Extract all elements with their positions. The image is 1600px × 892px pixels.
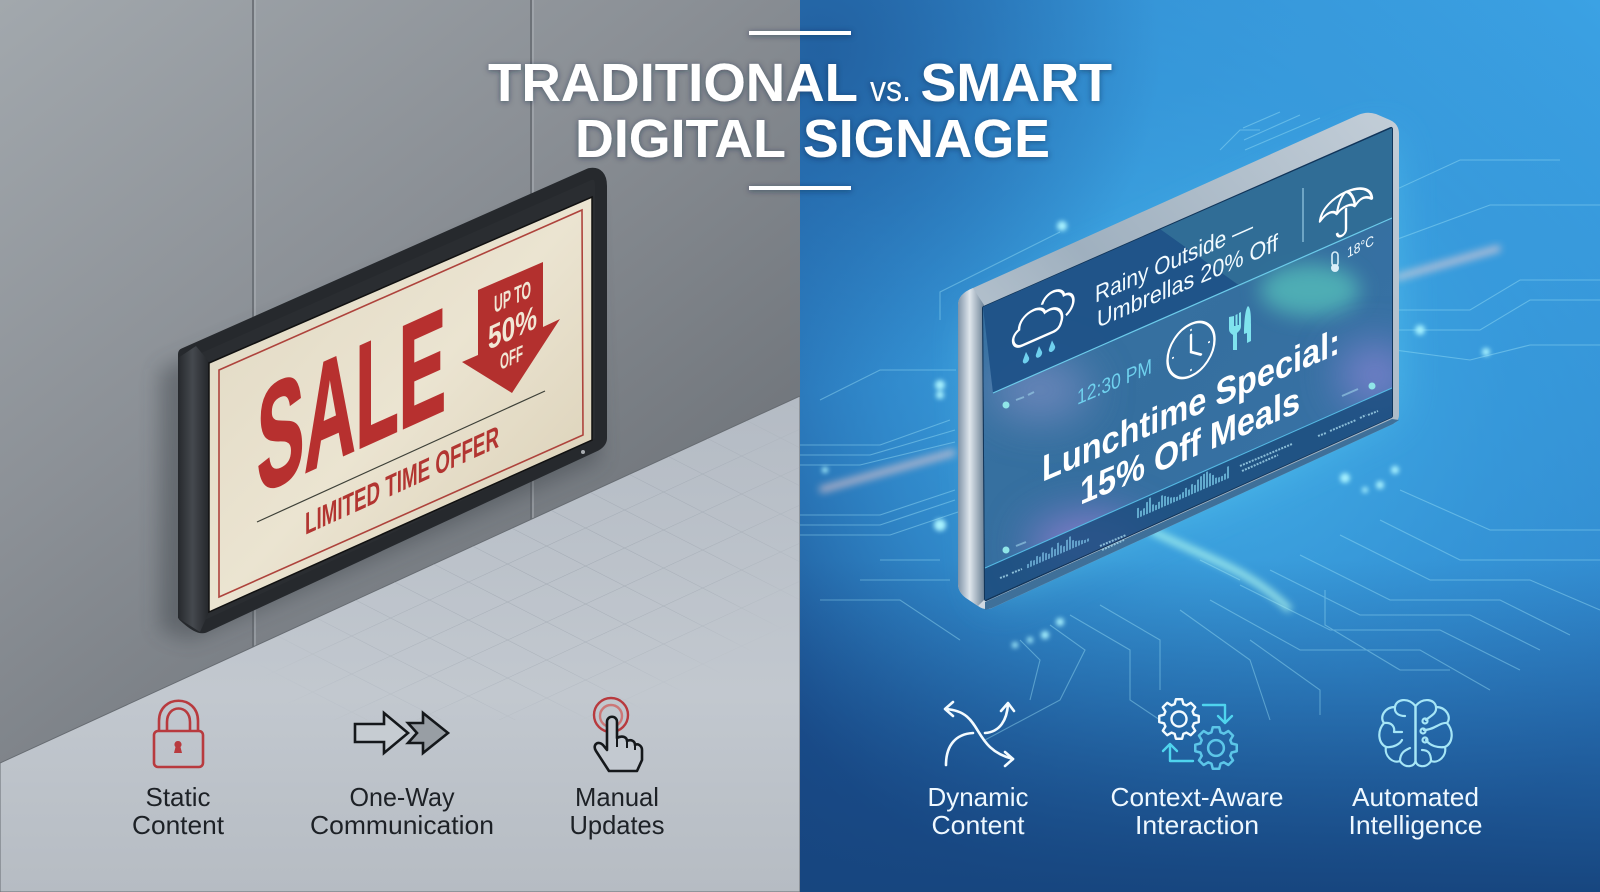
icon: gears and arrows xyxy=(1159,699,1237,769)
title digital: DIGITAL xyxy=(575,109,786,169)
icon: double arrows xyxy=(355,713,448,753)
limited time offer: LIMITED TIME OFFER xyxy=(305,419,499,542)
rainy line one: Rainy Outside — xyxy=(1095,212,1254,309)
feature: one-way communication xyxy=(310,713,494,840)
status dashes xyxy=(1016,389,1358,546)
bottom band line xyxy=(985,388,1392,568)
icon: brain xyxy=(1379,700,1452,766)
off: OFF xyxy=(500,340,523,375)
smart sign xyxy=(958,113,1410,610)
floor tile grid xyxy=(310,420,800,718)
paper screen xyxy=(209,197,592,612)
bottom band xyxy=(985,388,1392,600)
icon: thermometer xyxy=(1331,252,1339,272)
label: Manual xyxy=(575,782,659,812)
rule line xyxy=(257,391,545,522)
floor xyxy=(0,396,800,892)
data bars center xyxy=(1138,462,1228,518)
icon: padlock xyxy=(154,701,203,767)
icon: fork and knife xyxy=(1229,306,1251,350)
label: Static xyxy=(146,782,210,812)
metal bottom edge xyxy=(985,419,1399,610)
traditional sign: SALE xyxy=(257,276,446,525)
traditional sign shadow xyxy=(160,190,600,640)
panel: traditional signage side xyxy=(0,0,800,892)
sign bezel xyxy=(184,174,601,627)
panel: smart signage side xyxy=(800,0,1600,892)
screen content xyxy=(983,128,1410,600)
purple glows xyxy=(990,345,1410,575)
band line xyxy=(993,218,1392,393)
title block xyxy=(488,31,1112,190)
red inner border xyxy=(219,210,583,597)
feature: automated intelligence xyxy=(1348,700,1482,840)
label: Updates xyxy=(570,810,664,840)
feature: manual updates xyxy=(570,698,664,840)
top band xyxy=(983,128,1392,393)
traditional sign xyxy=(178,174,601,632)
wall panel seams xyxy=(253,0,533,650)
rainy line two: Umbrellas 20% Off xyxy=(1097,229,1278,334)
up to: UP TO xyxy=(494,276,531,319)
glowing nodes xyxy=(822,221,1490,648)
status dots xyxy=(1002,382,1376,554)
icon: touch hand xyxy=(594,698,642,771)
lunchtime special line: Lunchtime Special: xyxy=(1042,320,1340,491)
top title rule xyxy=(749,31,851,35)
title vs: vs. xyxy=(870,68,911,109)
blue background xyxy=(800,0,1600,892)
background glow xyxy=(800,0,1600,892)
bottom shade xyxy=(800,560,1600,892)
icon: rain cloud xyxy=(1013,283,1073,369)
tiny data marks xyxy=(1000,411,1378,578)
screen xyxy=(984,129,1391,599)
pink light streak left xyxy=(820,452,955,490)
data bars left xyxy=(1028,529,1088,568)
cyan light streak xyxy=(1150,530,1290,610)
top left shade xyxy=(800,0,1200,400)
top band highlight xyxy=(1160,128,1392,286)
pink light streak right xyxy=(1395,248,1500,278)
main band xyxy=(983,128,1392,600)
bezel side edge xyxy=(178,346,210,632)
metal left edge xyxy=(958,288,984,606)
wall background xyxy=(0,0,800,892)
label: Automated xyxy=(1352,782,1479,812)
down arrow badge xyxy=(462,262,560,393)
power led xyxy=(581,450,585,454)
label: Context-Aware xyxy=(1110,782,1284,812)
icon: dynamic arrows xyxy=(945,702,1014,766)
label: Content xyxy=(932,810,1025,840)
time: 12:30 PM xyxy=(1077,354,1152,410)
top divider xyxy=(1302,188,1304,242)
discount line: 15% Off Meals xyxy=(1080,379,1300,514)
feature: context-aware interaction xyxy=(1110,699,1284,840)
label: Intelligence xyxy=(1348,810,1482,840)
teal glow xyxy=(1260,264,1360,316)
metal frame face xyxy=(958,113,1399,609)
circuit traces xyxy=(800,112,1600,740)
label: Communication xyxy=(310,810,494,840)
icon: clock xyxy=(1168,314,1214,386)
title signage: SIGNAGE xyxy=(803,109,1050,169)
label: Interaction xyxy=(1135,810,1259,840)
title traditional: TRADITIONAL xyxy=(488,53,858,113)
label: Content xyxy=(132,810,225,840)
label: Dynamic xyxy=(928,782,1028,812)
feature: dynamic content xyxy=(928,702,1028,840)
icon: umbrella xyxy=(1320,181,1372,245)
label: One-Way xyxy=(350,782,454,812)
bottom title rule xyxy=(749,186,851,190)
smart screen glow xyxy=(975,135,1395,600)
50%: 50% xyxy=(488,299,537,358)
title smart: SMART xyxy=(920,53,1112,113)
feature: static content xyxy=(132,701,225,840)
temperature: 18°C xyxy=(1347,233,1374,262)
